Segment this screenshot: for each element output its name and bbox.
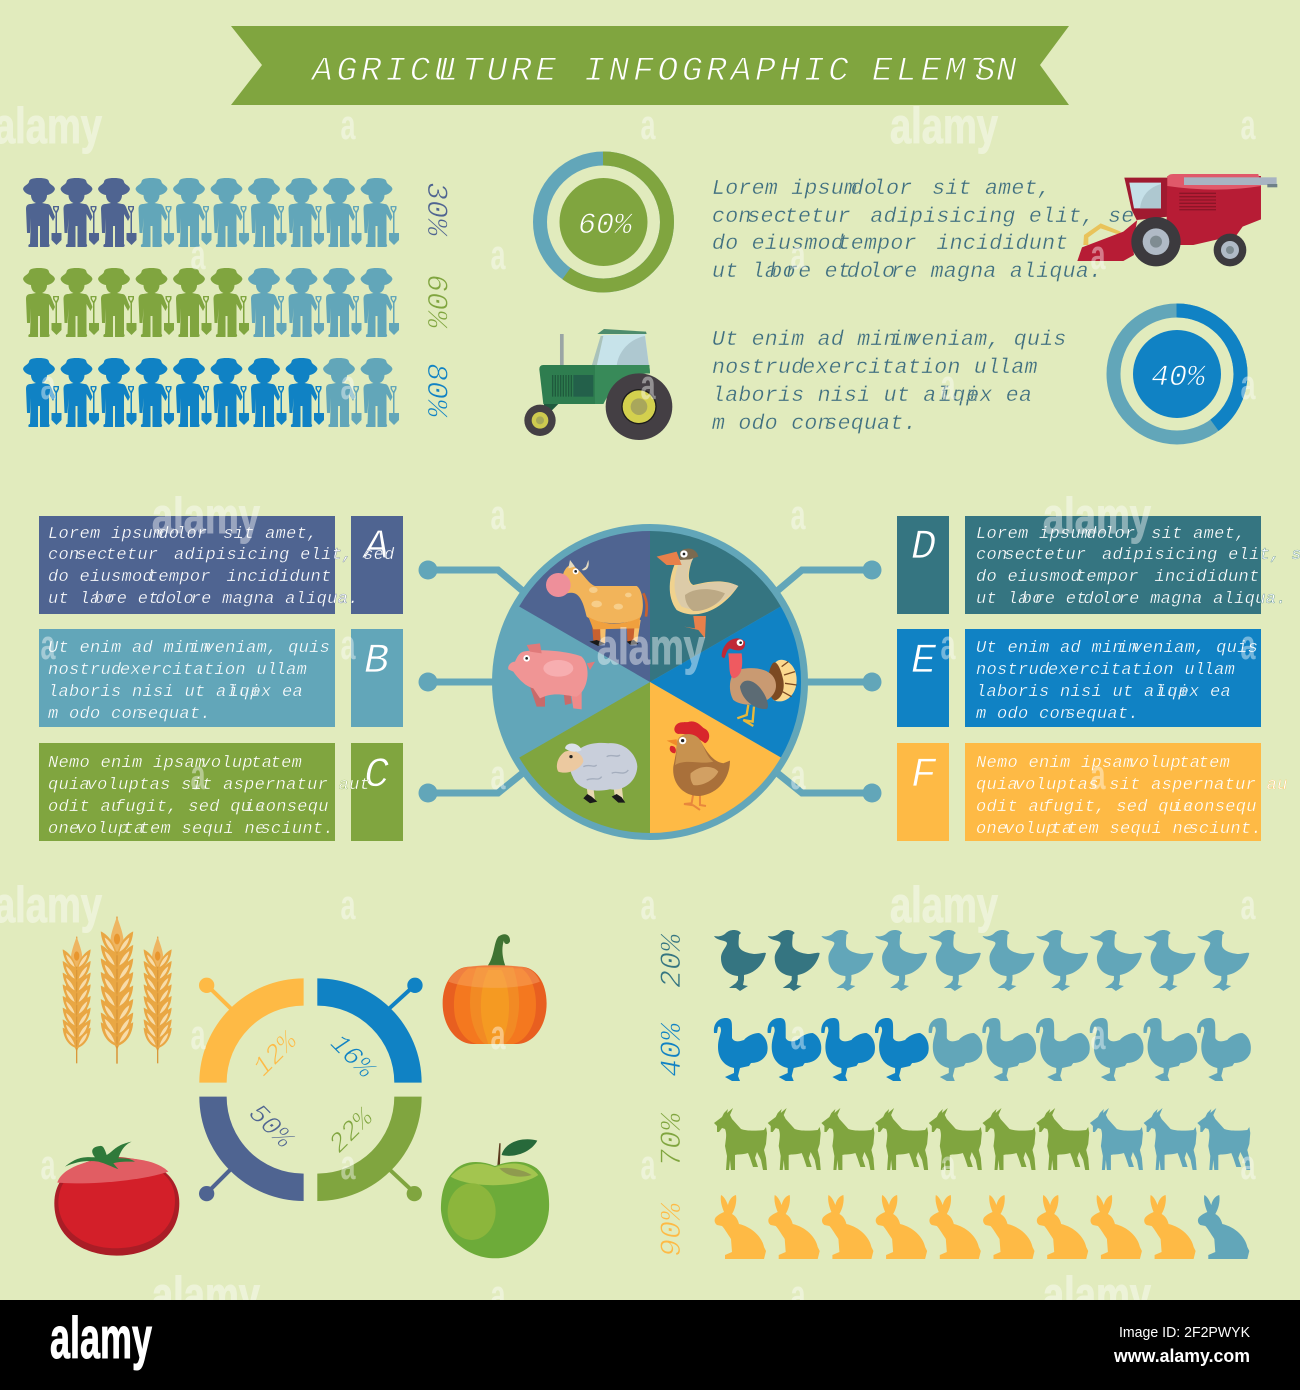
donut: 60%: 60%	[578, 209, 634, 243]
text block: second paragraph: Ut enim ad minimveniam, quis	[712, 328, 1067, 352]
footer bar: Image ID: 2F2PWYK	[1119, 1324, 1250, 1341]
panel F: onevoluptatem sequi nesciunt.	[976, 820, 1262, 839]
icon: apple	[441, 1139, 549, 1258]
pie chart with farm animals	[492, 524, 808, 840]
watermarks: a	[40, 361, 56, 408]
panel D: D	[911, 523, 936, 571]
donut: 60%	[540, 158, 667, 286]
panel C: odit aufugit, sed quiaconsequ	[48, 798, 329, 817]
panel C: quiavoluptas sit aspernatur aut	[48, 776, 370, 795]
panel C: Nemo enim ipsamvoluptatem	[48, 754, 302, 773]
vegetables and segmented ring group	[54, 917, 549, 1258]
pictogram row: rabbits 90%: 90%	[656, 1201, 690, 1257]
icon: sheep	[557, 743, 637, 803]
watermarks: a	[490, 751, 506, 798]
watermarks: alamy	[1043, 1267, 1151, 1323]
icon: cow	[546, 560, 647, 646]
watermarks: a	[790, 491, 806, 538]
watermarks: a	[1240, 881, 1256, 928]
footer bar	[0, 1300, 1300, 1390]
watermarks: alamy	[152, 1267, 260, 1323]
panel E: Ut enim ad minimveniam, quis	[976, 639, 1258, 658]
panel D	[897, 516, 1300, 614]
donut: 40%: 40%	[1151, 361, 1207, 395]
watermarks: a	[1240, 1141, 1256, 1188]
watermarks: a	[490, 1011, 506, 1058]
panel F: odit aufugit, sed quiaconsequ	[976, 798, 1257, 817]
watermarks: a	[790, 751, 806, 798]
watermarks: a	[190, 1011, 206, 1058]
ring chart: 16%	[323, 1029, 381, 1086]
text block: first paragraph: Lorem ipsumdolor sit amet,	[712, 177, 1051, 201]
watermarks: a	[940, 1141, 956, 1188]
pictogram row: goats 70%	[656, 1108, 1250, 1170]
title banner	[231, 26, 1069, 105]
panel C: onevoluptatem sequi nesciunt.	[48, 820, 334, 839]
text block: second paragraph: m odo consequat.	[712, 412, 917, 436]
watermarks: a	[640, 361, 656, 408]
ring chart: 50%	[241, 1099, 299, 1156]
icon: tomato	[54, 1142, 179, 1256]
watermarks: a	[190, 231, 206, 278]
panel A: ut labore etdolore magna aliqua.	[48, 590, 359, 609]
pictogram row: farmers 80%: 80%	[418, 363, 452, 419]
pictogram row: farmers 60%	[23, 268, 452, 337]
icon: tractor	[524, 329, 672, 440]
title banner: AGRICULTURE INFOGRAPHIC ELEMTSN	[310, 52, 1020, 91]
icon: pumpkin	[443, 934, 547, 1044]
panel F: Nemo enim ipsamvoluptatem	[976, 754, 1230, 773]
pictogram row: ducks 20%: 20%	[656, 932, 690, 988]
footer bar: alamy	[50, 1306, 152, 1371]
watermarks: a	[640, 101, 656, 148]
watermarks: a	[340, 361, 356, 408]
watermarks: a	[790, 231, 806, 278]
watermarks: a	[640, 1141, 656, 1188]
panel B: m odo consequat.	[48, 705, 211, 724]
panel A	[39, 516, 405, 614]
panel D: Lorem ipsumdolor sit amet,	[976, 525, 1246, 544]
donut: 40%	[1114, 310, 1240, 438]
panel A: do eiusmodtempor incididunt	[48, 568, 332, 587]
watermarks: a	[940, 621, 956, 668]
watermarks: alamy	[890, 98, 998, 154]
watermarks: a	[490, 491, 506, 538]
icon: hen	[667, 721, 730, 810]
pictogram row: farmers 30%: 30%	[418, 182, 452, 238]
watermarks: a	[490, 231, 506, 278]
watermarks: a	[190, 751, 206, 798]
icon: wheat	[63, 917, 172, 1064]
panel C: C	[364, 751, 389, 799]
watermarks: alamy	[152, 488, 260, 544]
pictogram row: ducks 20%	[656, 930, 1249, 991]
pictogram row: farmers 60%: 60%	[418, 274, 452, 330]
panel D: do eiusmodtempor incididunt	[976, 568, 1260, 587]
panel A: A	[361, 523, 389, 571]
watermarks: a	[340, 621, 356, 668]
pictogram row: turkeys 40%: 40%	[656, 1021, 690, 1077]
panel E: E	[911, 637, 937, 685]
pictogram row: turkeys 40%	[656, 1018, 1251, 1081]
watermarks: a	[340, 1141, 356, 1188]
panel B: B	[364, 637, 389, 685]
watermarks: a	[640, 881, 656, 928]
pictogram row: goats 70%: 70%	[656, 1111, 690, 1167]
watermarks: a	[940, 361, 956, 408]
panel F	[897, 743, 1298, 841]
text block: second paragraph: nostrudexercitation ullam	[712, 356, 1038, 380]
panel F: F	[911, 751, 937, 799]
watermarks: a	[490, 1271, 506, 1318]
panel F: quiavoluptas sit aspernatur au	[976, 776, 1288, 795]
panel B: Ut enim ad minimveniam, quis	[48, 639, 330, 658]
watermarks: a	[1090, 1011, 1106, 1058]
watermarks: a	[40, 1141, 56, 1188]
ring chart	[199, 978, 423, 1201]
watermarks: a	[1090, 751, 1106, 798]
watermarks: a	[1240, 101, 1256, 148]
watermarks: a	[1240, 361, 1256, 408]
ring chart: 22%	[324, 1102, 381, 1160]
watermarks: a	[790, 1271, 806, 1318]
panel E: m odo consequat.	[976, 705, 1139, 724]
panel A: Lorem ipsumdolor sit amet,	[48, 525, 318, 544]
panel B: laboris nisi ut aliquipex ea	[48, 683, 303, 702]
panel E: laboris nisi ut aliquipex ea	[976, 683, 1231, 702]
panel D: consectetur adipisicing elit, s	[976, 546, 1300, 565]
connector lines	[418, 560, 882, 802]
pictogram row: farmers 30%	[23, 178, 452, 247]
watermarks: alamy	[890, 877, 998, 933]
watermarks: a	[340, 881, 356, 928]
icon: goose	[657, 549, 738, 638]
watermarks: a	[340, 101, 356, 148]
icon: turkey	[722, 638, 797, 726]
panel E: nostrudexercitation ullam	[976, 661, 1235, 680]
panel E	[897, 629, 1269, 727]
icon: combine harvester	[1077, 174, 1277, 266]
text block: second paragraph: laboris nisi ut aliquipex ea	[712, 384, 1032, 408]
watermarks: a	[790, 1011, 806, 1058]
footer bar: www.alamy.com	[1113, 1346, 1250, 1366]
panel A: consectetur adipisicing elit, sed	[48, 546, 395, 565]
panel D: ut labore etdolore magna aliqua.	[976, 590, 1287, 609]
panel B	[39, 629, 403, 727]
icon: pig	[508, 643, 595, 709]
panel C	[39, 743, 403, 841]
watermarks: alamy	[597, 619, 705, 675]
watermarks: a	[1090, 231, 1106, 278]
watermarks: alamy	[1043, 488, 1151, 544]
ring chart: 12%	[248, 1026, 305, 1084]
watermarks: a	[1240, 621, 1256, 668]
pictogram row: rabbits 90%	[656, 1195, 1249, 1259]
text block: first paragraph: consectetur adipisicing elit, se	[712, 205, 1134, 229]
watermarks: a	[40, 621, 56, 668]
panel B: nostrudexercitation ullam	[48, 661, 307, 680]
text block: first paragraph: do eiusmodtempor incididunt	[712, 232, 1068, 256]
pictogram row: farmers 80%	[23, 358, 452, 427]
text block: first paragraph: ut labore etdolore magna aliqua.	[712, 260, 1102, 284]
